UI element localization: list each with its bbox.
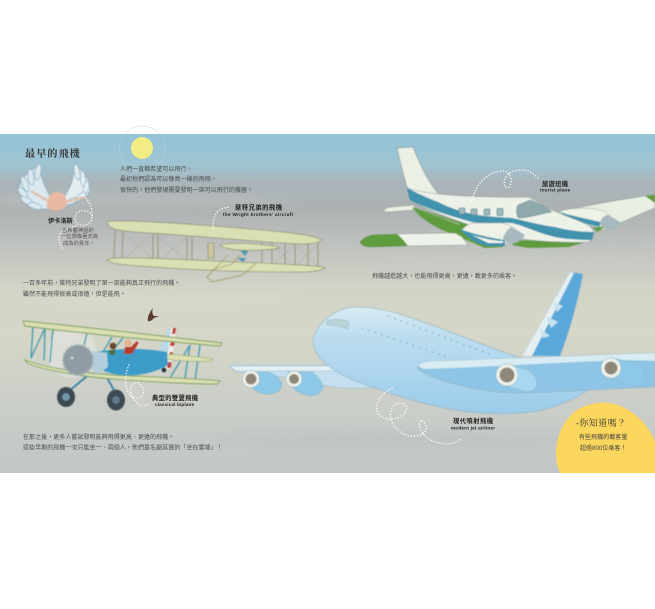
- engine cowl: [89, 351, 108, 374]
- green belly: [412, 207, 505, 248]
- tail fin: [158, 328, 175, 354]
- fuselage: [313, 307, 600, 414]
- cockpit windshield: [326, 319, 349, 329]
- struts and cross wires: [114, 230, 318, 268]
- falling figure silhouette: [148, 308, 159, 321]
- spinner: [503, 227, 525, 243]
- tailplane: [165, 354, 212, 361]
- cloud haze: [0, 194, 655, 450]
- paragraph: bigger planes: 飛機越造越大，也能飛得更高、更遠，載更多的乘客。: [372, 272, 517, 280]
- left wing: [16, 164, 52, 211]
- classical biplane: [23, 321, 222, 410]
- icarus figure: [16, 164, 90, 211]
- icarus dotted trail: [59, 196, 92, 249]
- icarus label: 成為的青年。: [63, 239, 95, 247]
- paragraph: first flight: 雖然不能飛得很高或很遠，但是能飛。: [23, 290, 126, 298]
- far wing: [230, 365, 375, 388]
- jet label: [451, 416, 495, 430]
- windows: [459, 208, 503, 216]
- fuselage: [407, 188, 594, 242]
- intro text: 最初他們認為可以像鳥一樣的飛翔。: [120, 175, 217, 183]
- sun: [119, 126, 165, 172]
- propeller hub: [63, 345, 93, 375]
- wright label: the Wright brothers' aircraft: [223, 212, 293, 217]
- callout bubble: [556, 403, 655, 473]
- blue stripe: [407, 188, 594, 240]
- callout text: 超過800位乘客！: [580, 444, 626, 452]
- paragraph: early flights: [23, 433, 223, 452]
- tourist plane dotted pointer: [472, 170, 538, 202]
- engine block: [208, 243, 214, 258]
- fuselage: [93, 349, 168, 375]
- biplane label: classical biplane: [155, 402, 194, 407]
- cabin windows: [362, 316, 492, 358]
- far engines: [246, 372, 282, 394]
- did you know callout: [556, 403, 655, 473]
- paragraph: first flight: 一百多年前，萊特兄弟發明了第一架能夠真正飛行的飛機。: [23, 279, 180, 287]
- sky background: [0, 134, 655, 473]
- elevator: [220, 243, 280, 250]
- jet label: modern jet airliner: [451, 426, 495, 430]
- body: [47, 192, 67, 210]
- tailplane: [383, 205, 415, 212]
- intro text: 人們一直都希望可以飛行。: [120, 165, 193, 173]
- pilots: [110, 343, 116, 349]
- biplane label: 典型的雙翼飛機: [152, 393, 199, 402]
- intro text: 很快的，他們發現需要發明一架可以飛行的機器。: [120, 186, 253, 194]
- callout text: 有些飛機的載客量: [579, 433, 627, 441]
- near wing: [418, 353, 655, 393]
- lower wing: [25, 360, 220, 384]
- front skids: [207, 255, 257, 282]
- right wing: [63, 164, 90, 206]
- wright label: [223, 202, 293, 217]
- top wing: [23, 321, 222, 346]
- engine nacelle: [462, 223, 515, 245]
- far wing: [557, 195, 655, 230]
- wheels: [57, 387, 75, 407]
- tail fin: [522, 272, 583, 356]
- callout heading: -你知道嗎？: [576, 417, 626, 428]
- pilot blue accents: [237, 250, 249, 262]
- far nacelle: [560, 208, 612, 228]
- icarus label: 古希臘神話的: [62, 226, 94, 234]
- rudder: [166, 328, 176, 369]
- tail fin: [397, 147, 441, 197]
- modern jet airliner: [230, 272, 655, 414]
- wright label: 萊特兄弟的飛機: [235, 202, 283, 212]
- icarus label: 伊卡洛斯: [48, 217, 73, 225]
- bottom wing: [107, 258, 325, 272]
- landing gear: [68, 374, 115, 392]
- paragraph: first flight: [23, 279, 180, 298]
- wing struts: [31, 326, 200, 380]
- propeller blur: [48, 326, 96, 378]
- wright dotted pointer: [213, 207, 230, 229]
- far wing green tip: [645, 195, 655, 203]
- intro text: [120, 165, 253, 194]
- tail wheel: [162, 368, 166, 372]
- callout text: [579, 433, 627, 452]
- paragraph: early flights: 在那之後，更多人嘗試發明能夠飛得更高、更遠的飛機。: [23, 433, 174, 441]
- paragraph: early flights: 這些早期的飛機一次只能坐一、兩個人，他們是名副其實的「坐在雲端」！: [23, 444, 223, 452]
- tourist plane: [360, 147, 655, 248]
- arms: [31, 191, 85, 202]
- tourist plane label: [540, 179, 570, 192]
- biplane dotted pointer: [126, 365, 150, 406]
- near engines: [507, 364, 537, 392]
- top wing: [108, 221, 322, 244]
- icarus label: [48, 217, 98, 247]
- jet label: 現代噴射飛機: [453, 416, 494, 425]
- biplane label: [152, 393, 199, 407]
- title: 最早的飛機: [25, 147, 81, 160]
- cockpit glass: [516, 200, 552, 218]
- jet dotted pointer: [377, 388, 461, 444]
- icarus label: 一位想像著天高: [61, 232, 98, 240]
- tourist plane label: tourist plane: [540, 188, 570, 192]
- wright brothers aircraft: [107, 221, 325, 282]
- near wing: [360, 233, 468, 247]
- tourist plane label: 旅遊班機: [542, 179, 569, 188]
